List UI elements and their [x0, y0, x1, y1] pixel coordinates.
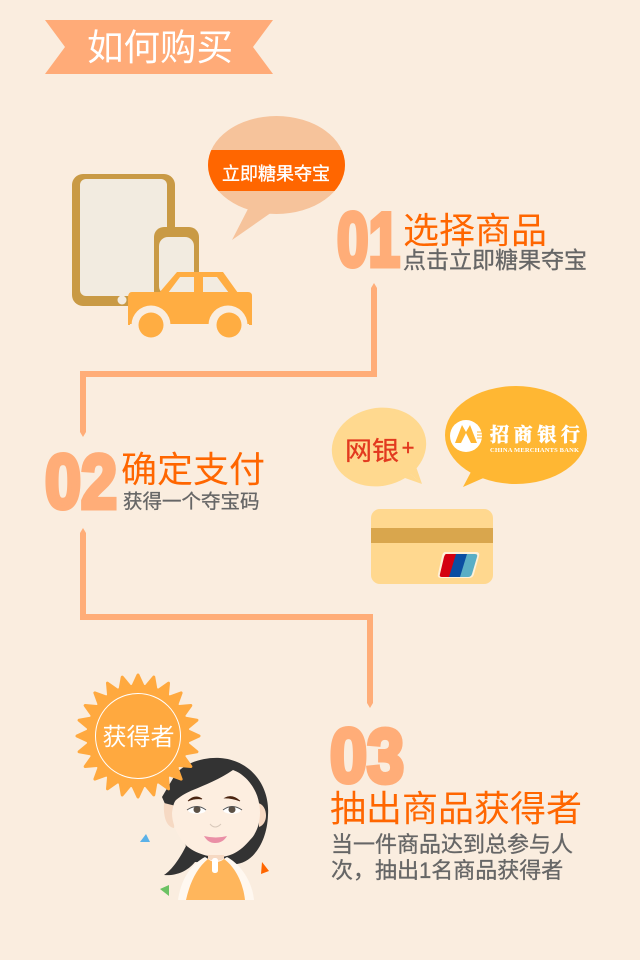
bubble: China Merchants Bank: 招商银行	[490, 423, 580, 446]
step 2 heading: 确定支付	[121, 449, 265, 490]
icon: tablet	[72, 174, 175, 306]
bubble: online banking: 网银	[345, 436, 399, 466]
bubble: China Merchants Bank	[445, 386, 587, 487]
eyebrows	[188, 797, 240, 801]
ears	[164, 803, 266, 828]
connector line from step 1 to step 2	[80, 283, 377, 437]
bubble: China Merchants Bank: CHINA MERCHANTS BANK	[490, 447, 579, 454]
sun badge: 获得者	[77, 675, 199, 797]
face	[172, 770, 260, 857]
icon: phone	[154, 227, 199, 312]
illustration: woman	[162, 758, 268, 900]
sun badge and woman illustration	[77, 675, 269, 900]
eyes	[187, 806, 242, 814]
step 1 description: 点击立即糖果夺宝	[403, 247, 587, 273]
confetti triangles	[140, 834, 269, 896]
collar	[212, 858, 218, 873]
icon: bank logo	[450, 420, 482, 452]
connector line from step 2 to step 3	[80, 528, 373, 708]
illustration: devices and car	[72, 174, 252, 344]
icon: UnionPay mark	[438, 552, 479, 578]
white jacket	[178, 857, 254, 900]
orange top	[186, 859, 245, 900]
bank card	[371, 509, 493, 584]
step 1 number: 01	[337, 198, 400, 283]
speech bubble: 立即糖果夺宝	[205, 116, 350, 240]
step 2 description: 获得一个夺宝码	[123, 491, 260, 513]
icon: car	[128, 272, 252, 344]
step 3 number: 03	[330, 714, 404, 799]
title ribbon: 如何购买	[87, 27, 233, 68]
sun badge: 获得者: 获得者	[102, 724, 174, 751]
bubble: online banking	[324, 399, 434, 495]
speech bubble: 立即糖果夺宝: 立即糖果夺宝	[222, 164, 330, 184]
step 3 description: 当一件商品达到总参与人	[331, 832, 573, 857]
hair	[162, 758, 268, 875]
step 3 heading: 抽出商品获得者	[330, 788, 582, 829]
step 2 number: 02	[45, 440, 117, 525]
step 3 description	[331, 832, 573, 883]
step 3 description: 次，抽出1名商品获得者	[331, 858, 563, 883]
mouth	[204, 836, 227, 843]
step 1 heading: 选择商品	[403, 210, 547, 251]
neck	[208, 855, 224, 863]
bubble: online banking: +	[402, 435, 414, 460]
title ribbon	[45, 20, 273, 74]
nose	[210, 824, 221, 827]
